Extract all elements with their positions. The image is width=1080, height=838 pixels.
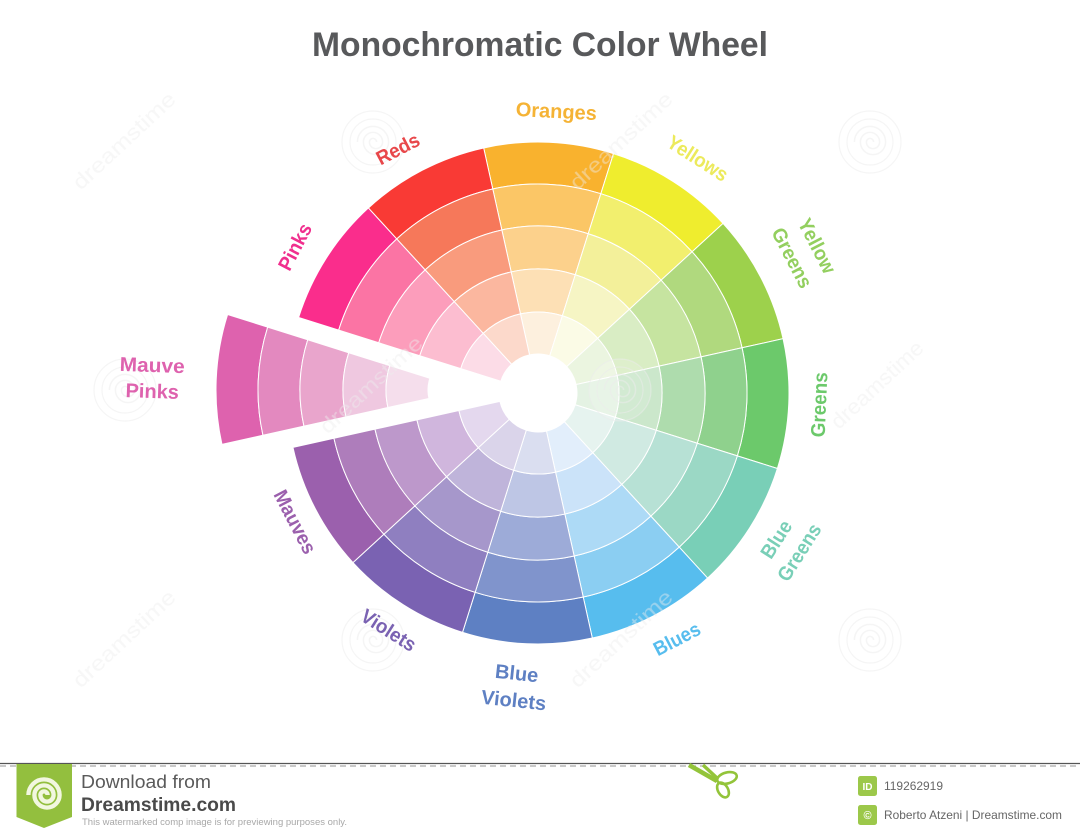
label: Reds: Reds xyxy=(373,129,424,170)
label: Mauve Pinks: Mauve xyxy=(119,354,185,378)
footer cut line xyxy=(0,764,1080,766)
label: Violets: Violets xyxy=(357,605,420,657)
label: Blue Violets: Blue xyxy=(494,661,539,687)
label: Blue Greens: Blue xyxy=(757,517,797,563)
watermark: dreamstime xyxy=(68,88,181,195)
segment: greens xyxy=(573,330,792,469)
label: Oranges: Oranges xyxy=(515,99,597,125)
label: Blues: Blues xyxy=(650,618,704,661)
footer text: Dreamstime.com xyxy=(81,795,236,816)
label: Yellows: Yellows xyxy=(663,131,732,186)
label: Blue Violets xyxy=(480,661,547,715)
color wheel xyxy=(213,139,792,647)
author credit: © xyxy=(863,810,872,822)
icon: dreamstime ribbon xyxy=(16,764,72,828)
segment: blues xyxy=(498,396,712,646)
author credit: Roberto Atzeni | Dreamstime.com xyxy=(884,808,1062,822)
label: Yellow Greens xyxy=(767,215,840,292)
segment: violets xyxy=(348,390,573,640)
icon: scissors xyxy=(689,765,738,799)
author credit xyxy=(858,805,1062,825)
watermark: dreamstime xyxy=(565,88,678,195)
image id: 119262919 xyxy=(884,779,943,793)
segment: yellow greens xyxy=(541,219,791,433)
footer text: This watermarked comp image is for previewing purposes only. xyxy=(82,817,347,828)
watermark: dreamstime xyxy=(827,337,929,434)
label: Yellow Greens: Greens xyxy=(767,224,816,292)
watermark: dreamstime xyxy=(315,332,428,439)
image id: ID xyxy=(862,782,872,793)
segment: reds xyxy=(364,140,578,390)
watermark xyxy=(68,88,929,693)
label: Mauve Pinks: Pinks xyxy=(125,380,179,404)
watermark: dreamstime xyxy=(68,586,181,693)
image id xyxy=(858,776,943,796)
segment: blue violets xyxy=(462,428,601,647)
label: Mauve Pinks xyxy=(119,354,185,404)
segment: yellows xyxy=(503,146,728,396)
footer text xyxy=(81,772,347,828)
label: Pinks: Pinks xyxy=(274,220,317,274)
label: Blue Greens: Greens xyxy=(773,520,826,586)
watermark: dreamstime xyxy=(565,586,678,693)
segment: mauve pinks (exploded) xyxy=(213,314,432,453)
label: Yellow Greens: Yellow xyxy=(793,215,840,278)
segment: blue greens xyxy=(535,358,785,583)
title: Monochromatic Color Wheel xyxy=(312,26,768,64)
label: Greens: Greens xyxy=(808,372,832,438)
segment: pinks xyxy=(291,203,541,428)
label: Blue Violets: Violets xyxy=(480,687,547,715)
footer text: Download from xyxy=(81,772,211,792)
segment: mauves xyxy=(285,353,535,567)
label: Mauves: Mauves xyxy=(269,487,320,558)
segment: oranges xyxy=(475,139,614,358)
